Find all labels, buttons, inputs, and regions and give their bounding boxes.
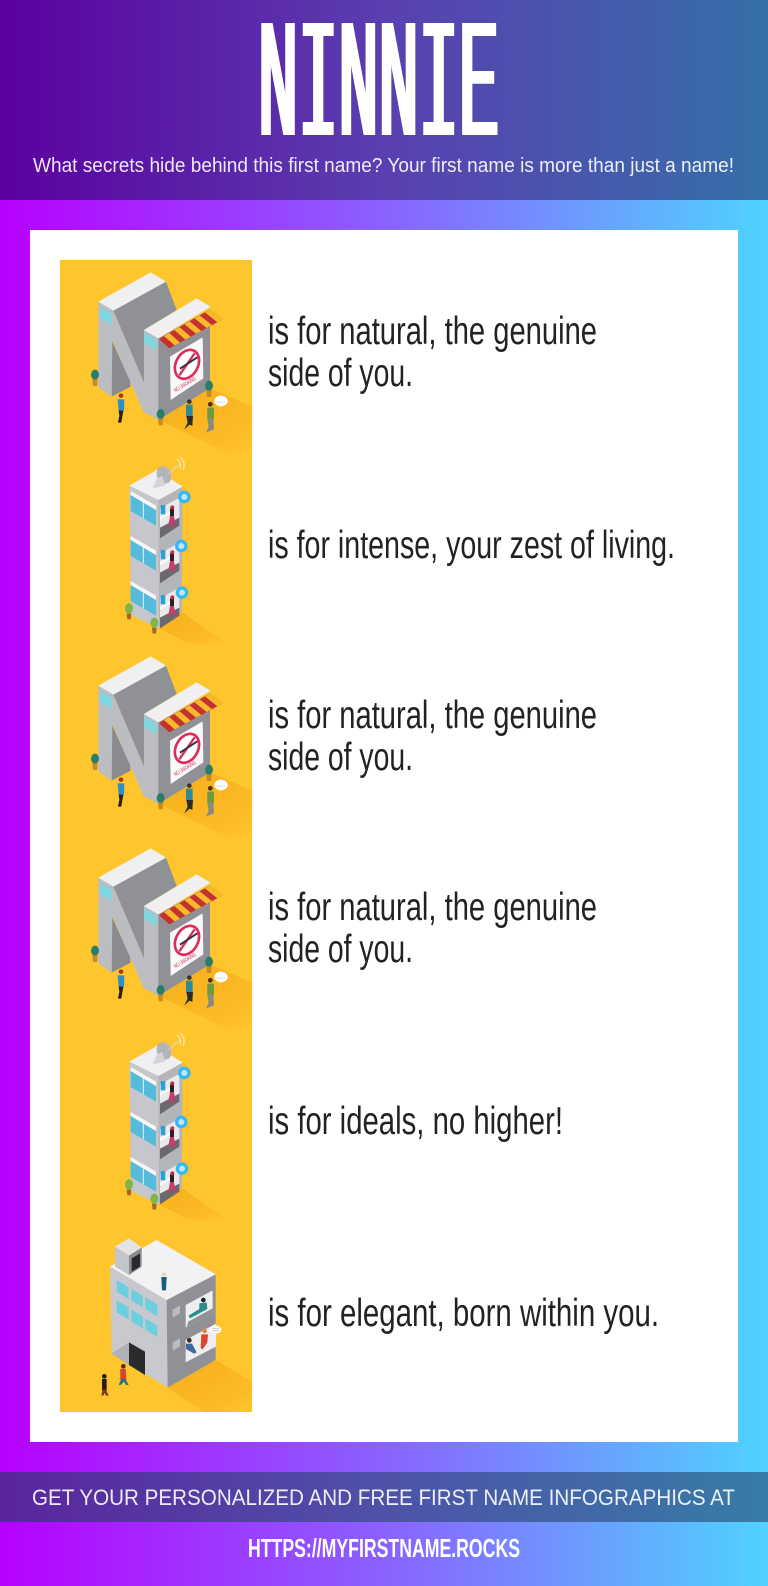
white content panel [30, 230, 738, 1442]
text: N meaning: side of you. [268, 352, 413, 395]
text: N meaning: is for natural, the genuine [268, 694, 597, 737]
icon: isometric tower I building with satellite dish [60, 452, 252, 644]
row 1: letter N [60, 260, 597, 452]
row 2: letter I [60, 452, 675, 644]
row 3: letter N [60, 644, 597, 836]
row 6: letter E [60, 1220, 659, 1412]
text: N meaning: side of you. [268, 736, 413, 779]
footer call to action text: GET YOUR PERSONALIZED AND FREE FIRST NAME INFOGRAPHICS AT [32, 1485, 735, 1510]
icon: isometric E office building [60, 1220, 252, 1412]
row 4: letter N [60, 836, 597, 1028]
footer url: HTTPS://MYFIRSTNAME.ROCKS [248, 1533, 520, 1563]
row 5: letter I [60, 1028, 563, 1220]
text: N meaning: is for natural, the genuine [268, 310, 597, 353]
icon: isometric tower I building with satellite dish [60, 1028, 252, 1220]
text: I meaning: is for ideals, no higher! [268, 1100, 563, 1143]
header band [0, 0, 768, 200]
text: N meaning: is for natural, the genuine [268, 886, 597, 929]
text: N meaning: side of you. [268, 928, 413, 971]
icon: isometric N building with no smoking sign [60, 836, 252, 1028]
subtitle: What secrets hide behind this first name? Your first name is more than just a name! [33, 155, 734, 177]
icon: isometric N building with no smoking sign [60, 644, 252, 836]
icon: isometric N building with no smoking sign [60, 260, 252, 452]
footer call to action band [0, 1472, 768, 1522]
